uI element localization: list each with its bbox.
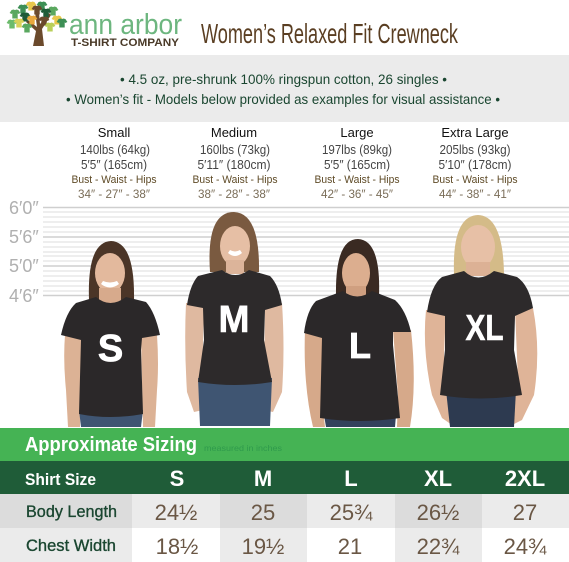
table header row: XL bbox=[424, 466, 452, 491]
table row: chest width: 22¾ bbox=[417, 534, 460, 559]
model details: medium bbox=[192, 125, 278, 201]
model details: small: 140lbs (64kg) bbox=[80, 143, 150, 157]
table row: body length: 25 bbox=[251, 500, 275, 525]
sizing table bbox=[0, 428, 569, 562]
model details: extra large: 44″ - 38″ - 41″ bbox=[439, 189, 511, 201]
model: large bbox=[304, 239, 414, 427]
model details: large: 42″ - 36″ - 45″ bbox=[321, 189, 393, 201]
model details: extra large: Extra Large bbox=[441, 125, 509, 140]
height labels bbox=[9, 198, 39, 306]
model: medium bbox=[185, 212, 284, 426]
table row: body length: Body Length bbox=[26, 502, 117, 521]
table header row: L bbox=[344, 466, 358, 491]
model: small bbox=[61, 241, 160, 427]
model details: small: Bust - Waist - Hips bbox=[72, 174, 157, 186]
model details: medium: Bust - Waist - Hips bbox=[192, 174, 278, 186]
table row: chest width: 18½ bbox=[156, 534, 198, 559]
model details: medium: 160lbs (73kg) bbox=[200, 143, 270, 157]
model details: medium: Medium bbox=[211, 125, 257, 140]
height labels: 5′0″ bbox=[9, 256, 39, 276]
table row: body length: 24½ bbox=[155, 500, 197, 525]
fabric detail line: • 4.5 oz, pre-shrunk 100% ringspun cotton, 26 singles • bbox=[120, 71, 447, 87]
model details: medium: 5′11″ (180cm) bbox=[198, 158, 270, 172]
height labels: 6′0″ bbox=[9, 198, 39, 218]
table title bar: measured in inches bbox=[204, 443, 282, 453]
table row: chest width: 24¾ bbox=[504, 534, 547, 559]
shirt letter XL: XL bbox=[466, 307, 504, 348]
model details: small: 34″ - 27″ - 38″ bbox=[78, 189, 150, 201]
model details: extra large: 5′10″ (178cm) bbox=[438, 158, 512, 172]
icon: t-shirt tree bbox=[7, 2, 67, 46]
table header row: M bbox=[254, 466, 272, 491]
model details: large: 5′5″ (165cm) bbox=[324, 158, 390, 172]
logo wordmark: ann arbor bbox=[69, 9, 182, 41]
table title bar bbox=[0, 428, 569, 461]
model details: large: Bust - Waist - Hips bbox=[314, 174, 400, 186]
model details: small: Small bbox=[98, 125, 130, 140]
model details: small: 5′5″ (165cm) bbox=[81, 158, 147, 172]
model details: extra large: 205lbs (93kg) bbox=[440, 143, 510, 157]
model details: large: 197lbs (89kg) bbox=[322, 143, 392, 157]
table header row: S bbox=[170, 466, 184, 491]
table row: chest width bbox=[0, 528, 569, 562]
shirt letter M: M bbox=[218, 299, 250, 341]
table row: chest width: 19½ bbox=[242, 534, 284, 559]
logo subtitle: T-SHIRT COMPANY bbox=[71, 37, 180, 49]
fit detail line: • Women’s fit - Models below provided as examples for visual assistance • bbox=[66, 91, 500, 107]
shirt letter L: L bbox=[349, 325, 371, 366]
height labels: 4′6″ bbox=[9, 286, 39, 306]
model details: extra large: Bust - Waist - Hips bbox=[432, 174, 518, 186]
table row: body length: 26½ bbox=[417, 500, 459, 525]
table row: body length: 27 bbox=[513, 500, 537, 525]
table title bar: Approximate Sizing bbox=[25, 433, 197, 456]
table header row: 2XL bbox=[505, 466, 545, 491]
panel: fabric details band bbox=[0, 55, 569, 122]
table row: body length: 25¾ bbox=[330, 500, 373, 525]
model details: large: Large bbox=[340, 125, 374, 140]
model: extra large bbox=[425, 215, 537, 427]
model details: large bbox=[314, 125, 400, 201]
height chart bbox=[9, 198, 569, 306]
shirt letter S: S bbox=[98, 328, 123, 370]
model details: medium: 38″ - 28″ - 38″ bbox=[198, 189, 270, 201]
table row: body length bbox=[0, 494, 569, 528]
table row: chest width: 21 bbox=[338, 534, 362, 559]
model details: extra large bbox=[432, 125, 518, 201]
logo: ann arbor t-shirt company bbox=[7, 2, 182, 49]
table header row bbox=[0, 461, 569, 494]
table header row: Shirt Size bbox=[25, 470, 96, 489]
table row: chest width: Chest Width bbox=[26, 536, 116, 555]
height labels: 5′6″ bbox=[9, 227, 39, 247]
model details: small bbox=[72, 125, 157, 201]
